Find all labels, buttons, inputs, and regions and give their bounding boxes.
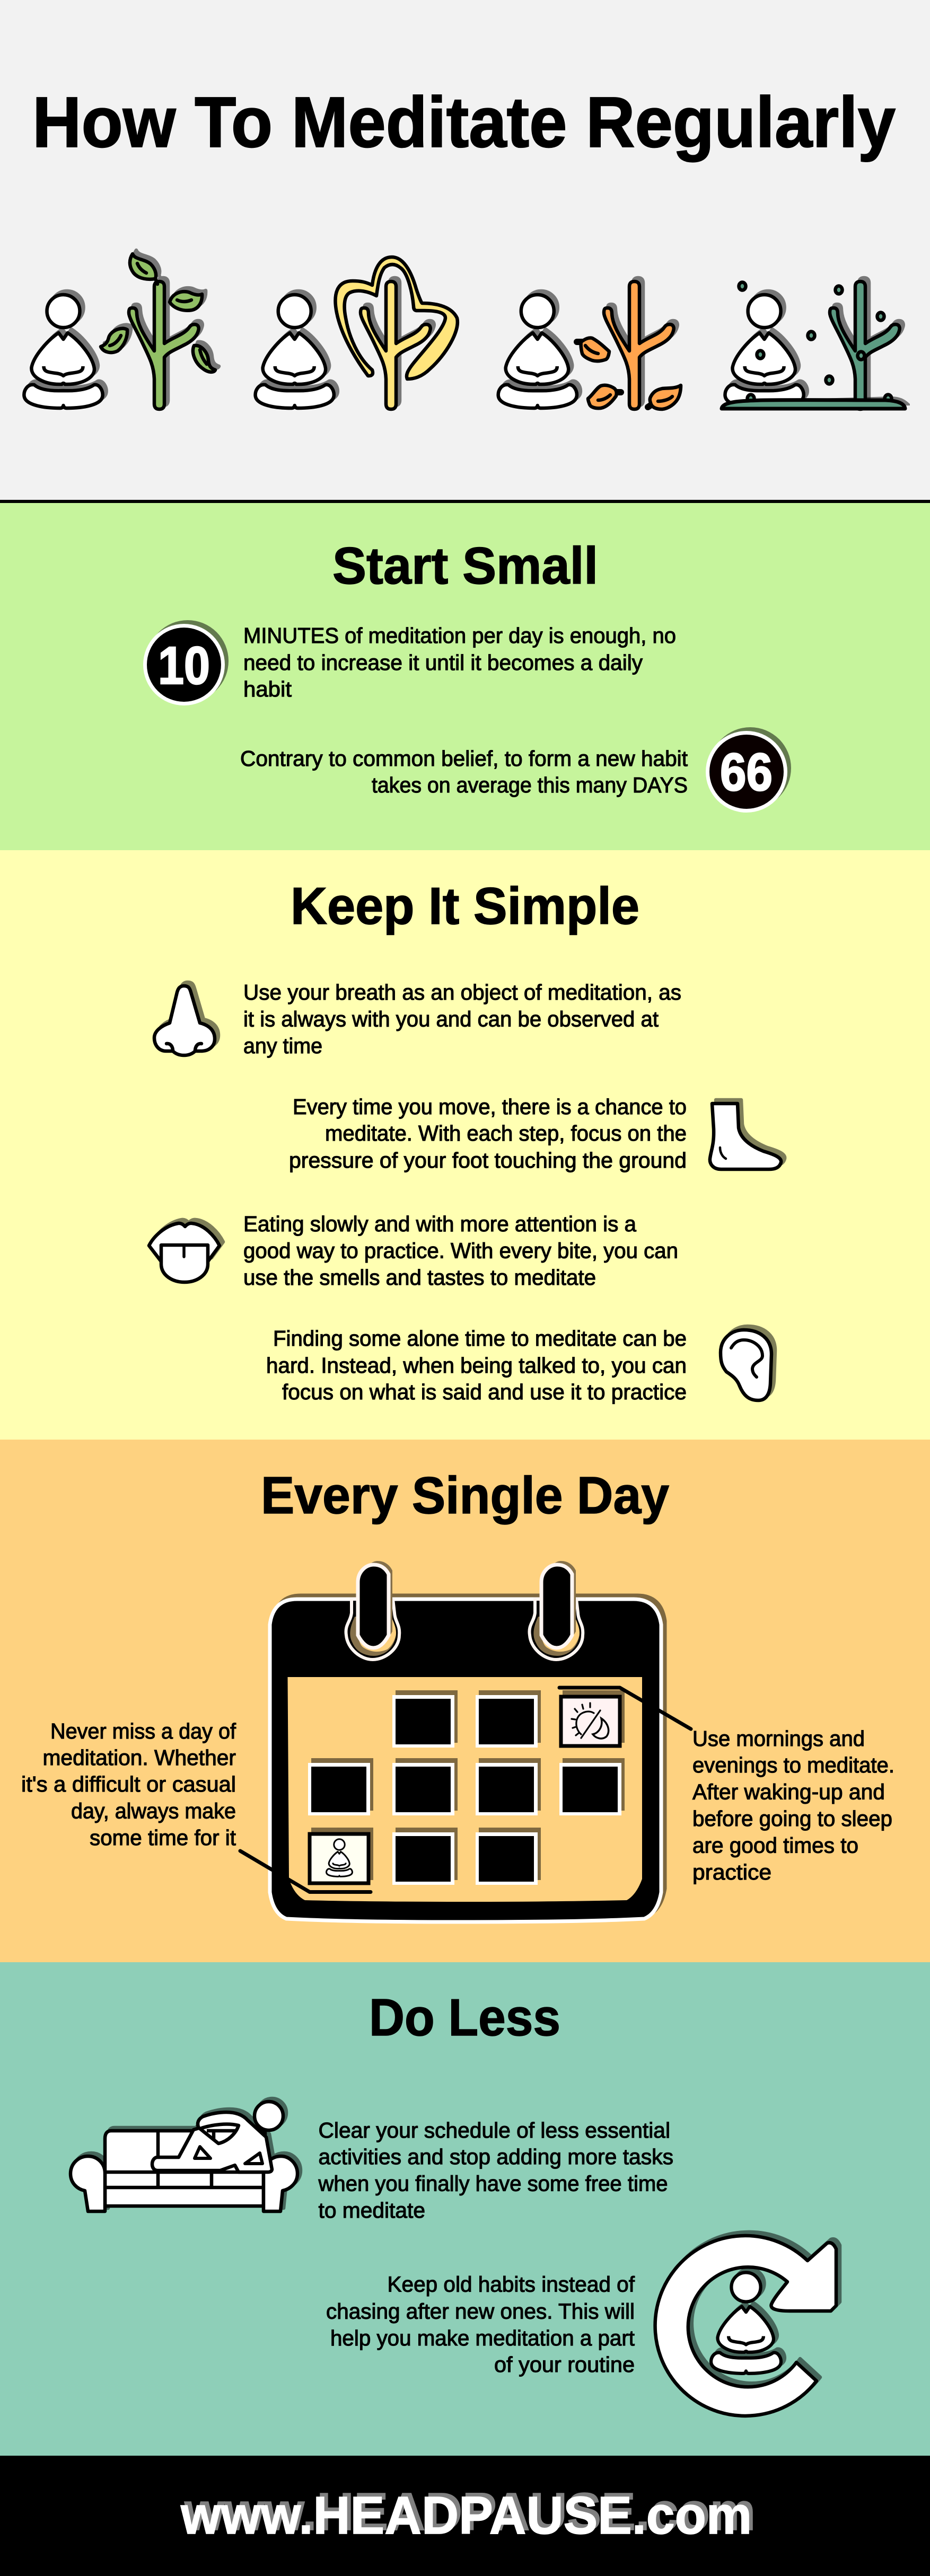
- text: eating: good way to practice. With every bite, you can: [243, 1238, 678, 1263]
- text: listening: focus on what is said and use it to practice: [282, 1380, 687, 1404]
- icon: meditator with winter tree: [721, 278, 910, 409]
- callout line: morning and evening cell: [559, 1688, 691, 1729]
- text: minutes of meditation: need to increase it until it becomes a daily: [243, 650, 643, 675]
- text: mornings and evenings: Use mornings and: [692, 1726, 865, 1751]
- text: eating: use the smells and tastes to meditate: [243, 1265, 596, 1290]
- calendar cell: meditator: [310, 1834, 369, 1883]
- text: walking: Every time you move, there is a chance to: [293, 1095, 687, 1119]
- icon: meditator with spring tree: [24, 250, 219, 409]
- badge: 10: 10: [158, 636, 210, 695]
- text: mornings and evenings: After waking-up and: [692, 1780, 885, 1804]
- text: sixty-six days: Contrary to common belief, to form a new habit: [240, 746, 688, 771]
- panel: Every Single Day: [0, 1440, 930, 1962]
- heading: Do Less: Do Less: [369, 1988, 560, 2046]
- text: listening: hard. Instead, when being talked to, you can: [266, 1353, 687, 1378]
- heading: Keep It Simple: Keep It Simple: [291, 877, 639, 935]
- text: keep old habits: [326, 2272, 635, 2377]
- text: never miss a day: some time for it: [90, 1825, 236, 1850]
- footer website: www.HEADPAUSE.com: [180, 2486, 752, 2545]
- text: eating: Eating slowly and with more attention is a: [243, 1212, 636, 1236]
- icon: foot: [710, 1100, 785, 1169]
- badge: 10: [143, 620, 229, 705]
- text: never miss a day: [21, 1719, 236, 1850]
- text: walking: meditate. With each step, focus on the: [325, 1121, 687, 1145]
- icon: meditator with autumn tree: [498, 278, 681, 409]
- text: mornings and evenings: before going to sleep: [692, 1806, 892, 1831]
- text: breath: any time: [243, 1034, 322, 1058]
- heading: Start Small: Start Small: [332, 536, 598, 595]
- panel: Do Less: [0, 1962, 930, 2456]
- badge: 66: 66: [720, 743, 773, 802]
- text: clear schedule: to meditate: [318, 2198, 425, 2222]
- icon: ear: [721, 1326, 775, 1400]
- text: keep old habits: chasing after new ones. This will: [326, 2299, 635, 2324]
- calendar cell: sun and moon: [561, 1697, 620, 1746]
- text: keep old habits: help you make meditation a part: [330, 2326, 635, 2350]
- text: breath: [243, 980, 681, 1058]
- text: listening: [266, 1326, 687, 1404]
- footer website: www.HEADPAUSE.com: [184, 2482, 756, 2542]
- text: walking: [289, 1095, 687, 1172]
- text: minutes of meditation: habit: [243, 677, 292, 701]
- text: eating: [243, 1212, 678, 1290]
- text: clear schedule: Clear your schedule of less essential: [318, 2118, 670, 2142]
- title: How To Meditate Regularly: [32, 82, 896, 162]
- icon: circular arrow with meditator: [655, 2232, 840, 2416]
- text: keep old habits: Keep old habits instead of: [387, 2272, 635, 2296]
- callout line: meditator cell: [240, 1851, 371, 1892]
- icon: person on sofa: [71, 2098, 301, 2211]
- text: clear schedule: [318, 2118, 673, 2222]
- text: minutes of meditation: MINUTES of meditation per day is enough, no: [243, 623, 676, 648]
- text: never miss a day: meditation. Whether: [42, 1745, 236, 1770]
- text: listening: Finding some alone time to meditate can be: [273, 1326, 687, 1351]
- text: mornings and evenings: are good times to: [692, 1833, 858, 1857]
- text: breath: Use your breath as an object of meditation, as: [243, 980, 681, 1004]
- text: breath: it is always with you and can be observed at: [243, 1007, 659, 1031]
- badge: 66: [706, 727, 791, 813]
- icon: mouth and tongue: [149, 1220, 223, 1282]
- text: minutes of meditation: [243, 623, 676, 701]
- text: mornings and evenings: [692, 1726, 894, 1884]
- panel: Start Small: [0, 503, 930, 850]
- calendar: [240, 1561, 691, 1922]
- text: never miss a day: day, always make: [71, 1799, 236, 1823]
- text: clear schedule: when you finally have some free time: [318, 2171, 668, 2195]
- icon: nose: [154, 982, 218, 1055]
- panel: footer: [0, 2456, 930, 2576]
- text: walking: pressure of your foot touching the ground: [289, 1148, 687, 1172]
- text: keep old habits: of your routine: [494, 2352, 635, 2377]
- panel: header: [0, 0, 930, 503]
- text: mornings and evenings: practice: [692, 1860, 771, 1884]
- text: mornings and evenings: evenings to meditate.: [692, 1753, 894, 1777]
- heading: Every Single Day: Every Single Day: [261, 1466, 669, 1524]
- text: clear schedule: activities and stop adding more tasks: [318, 2145, 673, 2169]
- panel: Keep It Simple: [0, 850, 930, 1440]
- text: never miss a day: Never miss a day of: [50, 1719, 236, 1743]
- text: sixty-six days: takes on average this many DAYS: [372, 773, 688, 797]
- icon: meditator with summer tree: [256, 257, 458, 409]
- text: never miss a day: it's a difficult or casual: [21, 1772, 236, 1796]
- text: sixty-six days: [240, 746, 688, 797]
